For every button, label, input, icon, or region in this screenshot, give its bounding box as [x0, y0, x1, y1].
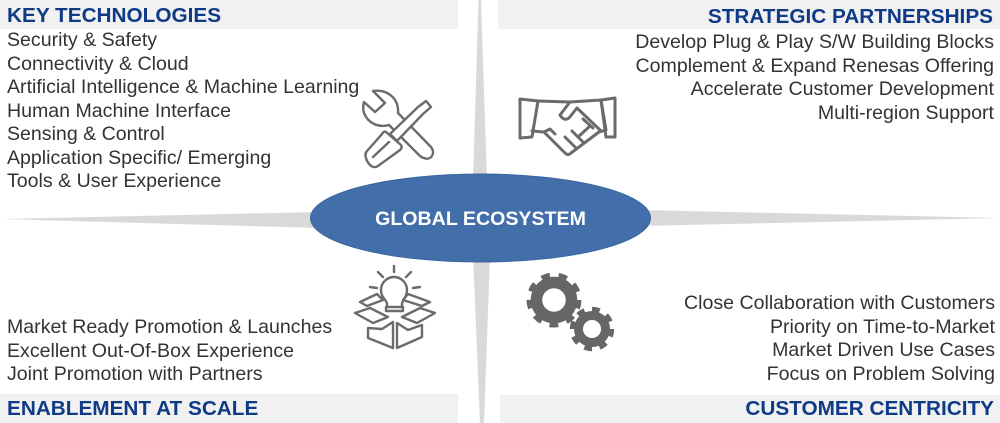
text: enablement list: Market Ready Promotion & Launches	[7, 316, 332, 338]
panel: customer centricity header	[500, 395, 1000, 423]
text: customer centricity list	[684, 292, 995, 384]
text: key technologies list: Artificial Intelligence & Machine Learning	[7, 76, 359, 98]
heading: enablement at scale: ENABLEMENT AT SCALE	[7, 397, 258, 420]
text: key technologies list: Security & Safety	[7, 29, 157, 51]
panel: enablement at scale header	[0, 394, 458, 423]
text: customer centricity list: Market Driven Use Cases	[772, 339, 995, 361]
text: enablement list: Excellent Out-Of-Box Experience	[7, 340, 294, 362]
text: strategic partnerships list	[635, 31, 994, 124]
text: strategic partnerships list: Develop Plug & Play S/W Building Blocks	[635, 31, 994, 53]
text: customer centricity list: Priority on Time-to-Market	[770, 316, 995, 338]
heading: key technologies: KEY TECHNOLOGIES	[7, 4, 221, 27]
text: strategic partnerships list: Complement & Expand Renesas Offering	[636, 54, 994, 76]
text: customer centricity list: Focus on Problem Solving	[767, 362, 995, 384]
text: key technologies list: Connectivity & Cloud	[7, 52, 189, 74]
text: enablement list	[7, 316, 332, 385]
text: key technologies list: Human Machine Interface	[7, 100, 231, 122]
text: strategic partnerships list: Accelerate Customer Development	[691, 78, 994, 100]
text: strategic partnerships list: Multi-region Support	[818, 102, 994, 124]
ellipse label: GLOBAL ECOSYSTEM	[375, 208, 586, 230]
text: key technologies list: Sensing & Control	[7, 123, 165, 145]
heading: customer centricity: CUSTOMER CENTRICITY	[745, 397, 994, 420]
panel: strategic partnerships header	[498, 0, 1000, 29]
text: key technologies list: Application Specific/ Emerging	[7, 146, 271, 168]
text: customer centricity list: Close Collaboration with Customers	[684, 292, 995, 314]
heading: strategic partnerships: STRATEGIC PARTNERSHIPS	[708, 5, 993, 28]
text: key technologies list: Tools & User Experience	[7, 170, 221, 192]
panel: key technologies header	[0, 0, 458, 29]
text: enablement list: Joint Promotion with Partners	[7, 363, 263, 385]
text: key technologies list	[7, 29, 359, 192]
